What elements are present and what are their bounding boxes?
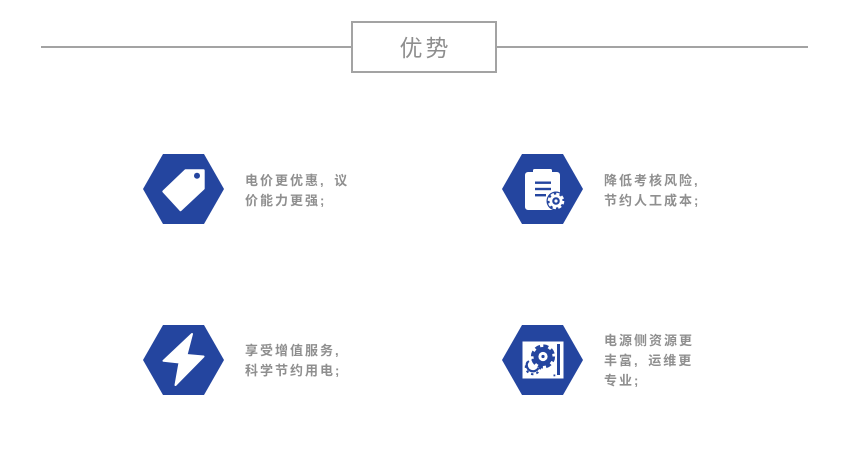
icon: price tag hexagon xyxy=(143,154,224,224)
text: risk and cost: 降低考核风险, 节约人工成本; xyxy=(604,173,700,208)
icon: gears panel hexagon xyxy=(502,325,583,395)
title xyxy=(351,21,497,73)
text: value added services: 享受增值服务, 科学节约用电; xyxy=(245,343,341,378)
icon: clipboard with gear hexagon xyxy=(502,154,583,224)
title: 优势 xyxy=(400,35,452,61)
icon: lightning bolt hexagon xyxy=(143,325,224,395)
text: power source resources: 电源侧资源更 丰富, 运维更 专业; xyxy=(604,333,694,388)
text: pricing advantage: 电价更优惠, 议 价能力更强; xyxy=(245,173,349,208)
